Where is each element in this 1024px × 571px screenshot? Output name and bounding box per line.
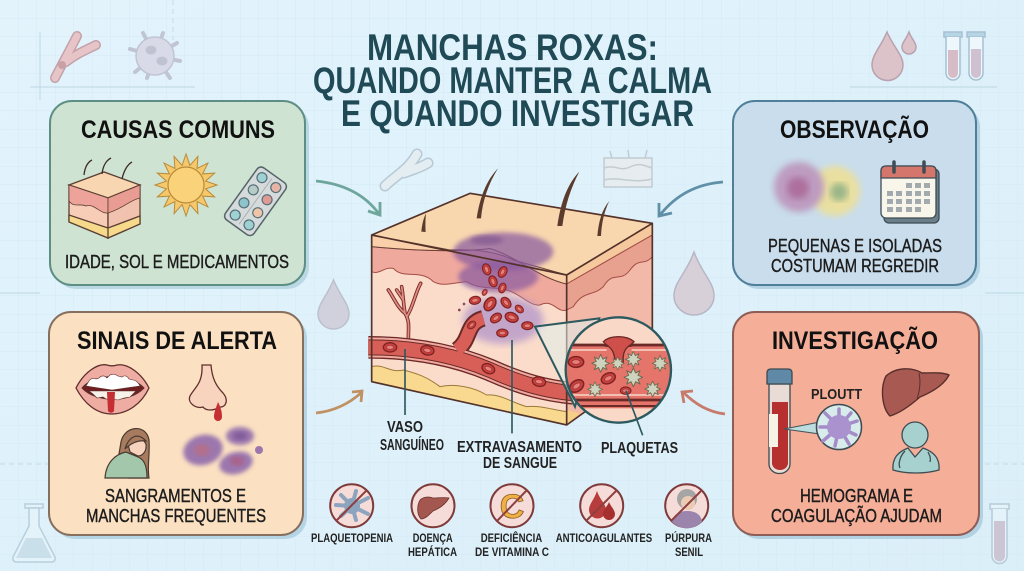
label: extravasamento de sangue bbox=[457, 439, 582, 472]
label: extravasamento de sangue: EXTRAVASAMENTO bbox=[457, 439, 582, 456]
panel: observação bbox=[733, 101, 980, 289]
caption: investigação: HEMOGRAMA E bbox=[800, 486, 913, 506]
caption: investigação bbox=[771, 486, 942, 526]
skin cross-section diagram bbox=[368, 168, 673, 435]
icon: faint single tube bbox=[990, 504, 1009, 564]
icon: faint virus cell bbox=[130, 33, 180, 78]
label: vaso sanguíneo bbox=[380, 419, 444, 454]
heading: observação: OBSERVAÇÃO bbox=[780, 114, 929, 144]
caption: sinais de alerta: SANGRAMENTOS E bbox=[105, 486, 246, 506]
cause: púrpura senil bbox=[665, 484, 712, 559]
icon: doctor bbox=[893, 422, 939, 473]
arrow: investigação to skin bbox=[682, 391, 725, 414]
icon: bruises bbox=[180, 427, 263, 478]
icon: sun bbox=[155, 154, 217, 216]
heading: causas comuns: CAUSAS COMUNS bbox=[81, 116, 275, 144]
red blood cells in vessel bbox=[383, 319, 546, 387]
heading: investigação: INVESTIGAÇÃO bbox=[772, 325, 938, 355]
cause: deficiência de vitamina c: DE VITAMINA C bbox=[475, 545, 549, 559]
cause: púrpura senil: PÚRPURA bbox=[665, 530, 712, 545]
skin front face bbox=[372, 235, 567, 425]
icon: faint droplet left bbox=[318, 280, 349, 329]
cause: deficiência de vitamina c: C bbox=[500, 488, 524, 526]
caption: investigação: COAGULAÇÃO AJUDAM bbox=[771, 505, 942, 526]
caption: sinais de alerta: MANCHAS FREQUENTES bbox=[86, 506, 266, 526]
icon: tired woman bbox=[105, 429, 149, 478]
panel: causas comuns bbox=[50, 101, 309, 289]
cause: doença hepática bbox=[408, 484, 457, 559]
cause: doença hepática: HEPÁTICA bbox=[408, 544, 457, 559]
icon: faint droplet right bbox=[674, 252, 714, 315]
escaping blood cells bbox=[458, 263, 533, 337]
cause: anticoagulantes bbox=[556, 484, 652, 545]
arrow: causas to skin bbox=[316, 181, 380, 215]
icon: faint vessel center bbox=[385, 154, 428, 186]
arrow: observação to skin bbox=[659, 182, 723, 216]
icon: skin block bbox=[69, 158, 140, 238]
cause: plaquetopenia bbox=[311, 484, 393, 545]
icon: faint skin block center bbox=[604, 150, 652, 187]
cube outline bbox=[372, 193, 652, 425]
icon: faint blood drops bbox=[872, 32, 916, 80]
hairs bbox=[421, 168, 609, 236]
top skin surface bbox=[372, 193, 652, 275]
cause: plaquetopenia: PLAQUETOPENIA bbox=[311, 531, 393, 545]
leader lines bbox=[405, 340, 643, 435]
icon: pill blister bbox=[223, 165, 288, 238]
skin right face bbox=[567, 223, 652, 425]
icon: calendar bbox=[881, 162, 939, 223]
label: extravasamento de sangue: DE SANGUE bbox=[483, 455, 557, 472]
purple bruise bbox=[453, 232, 553, 344]
panel: investigação bbox=[733, 312, 983, 539]
zoom cone bbox=[535, 318, 599, 407]
label: vaso sanguíneo: SANGUÍNEO bbox=[380, 435, 444, 454]
icon: faint test tubes bbox=[944, 32, 985, 80]
icon: faint flask bbox=[13, 504, 55, 562]
heading: sinais de alerta: SINAIS DE ALERTA bbox=[77, 327, 277, 355]
panel: sinais de alerta bbox=[49, 312, 307, 539]
arrow: alerta to skin bbox=[316, 391, 362, 413]
icon: fading bruises bbox=[774, 162, 860, 216]
title bbox=[313, 27, 712, 134]
icon: faint blood vessel bbox=[55, 36, 96, 78]
caption: observação: PEQUENAS E ISOLADAS bbox=[768, 236, 942, 256]
cause: doença hepática: DOENÇA bbox=[413, 531, 453, 545]
main blood vessel bbox=[368, 318, 573, 393]
icon: bleeding nose bbox=[189, 365, 226, 421]
caption: sinais de alerta bbox=[86, 486, 266, 526]
title: E QUANDO INVESTIGAR bbox=[341, 93, 694, 134]
cause: púrpura senil: SENIL bbox=[675, 545, 703, 559]
label: plaquetas: PLAQUETAS bbox=[601, 440, 678, 457]
icon: blood tube bbox=[767, 369, 792, 474]
caption: observação: COSTUMAM REGREDIR bbox=[771, 256, 939, 276]
icon: platelet magnifier bbox=[784, 404, 862, 450]
icon: bleeding mouth bbox=[76, 365, 149, 414]
caption: observação bbox=[768, 236, 942, 276]
label: vaso sanguíneo: VASO bbox=[387, 419, 423, 436]
title: MANCHAS ROXAS: bbox=[367, 27, 658, 68]
cause: anticoagulantes: ANTICOAGULANTES bbox=[556, 531, 652, 545]
title: QUANDO MANTER A CALMA bbox=[313, 60, 712, 101]
icon: liver bbox=[883, 369, 949, 416]
cause: deficiência de vitamina c: DEFICIÊNCIA bbox=[481, 530, 542, 545]
magnified lens: platelets bbox=[563, 317, 673, 423]
cause: deficiência de vitamina c bbox=[475, 484, 549, 559]
small branching vessels bbox=[388, 283, 421, 340]
label: ploutt: PLOUTT bbox=[811, 386, 862, 403]
caption: causas comuns: IDADE, SOL E MEDICAMENTOS bbox=[65, 252, 289, 272]
causes icon row bbox=[311, 484, 712, 559]
